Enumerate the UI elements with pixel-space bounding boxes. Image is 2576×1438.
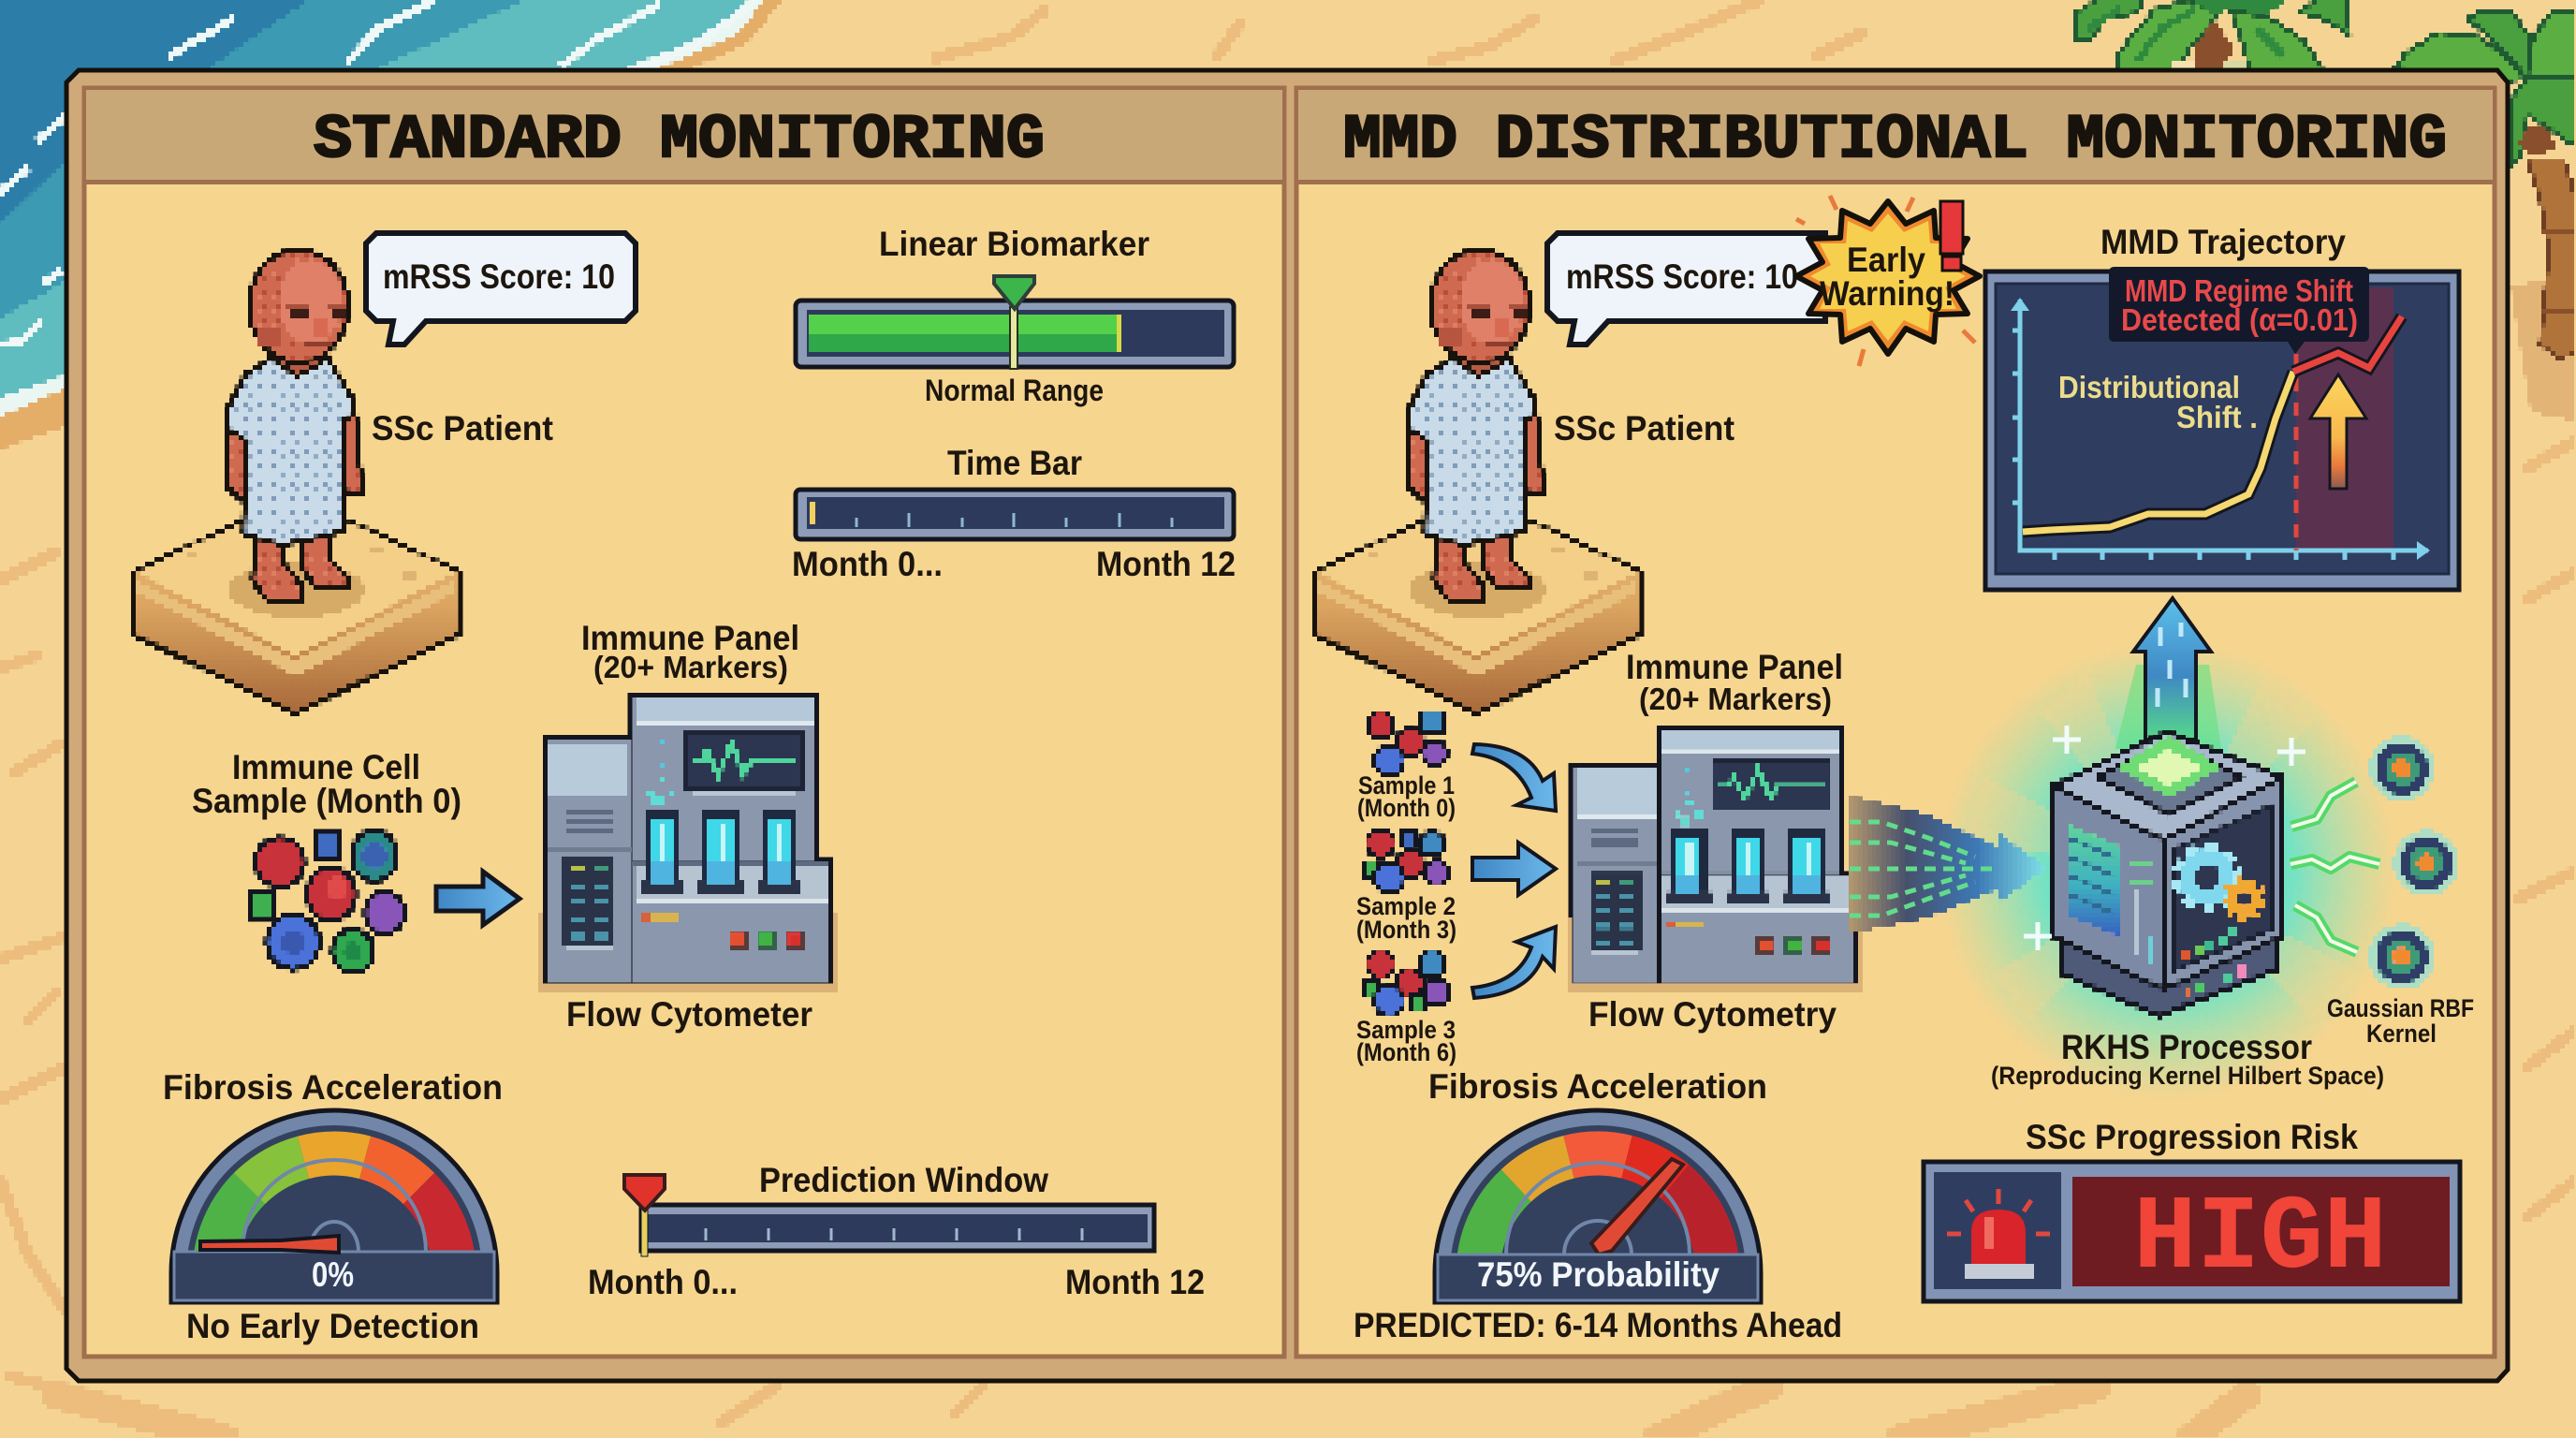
red marker [624,1175,665,1211]
red trajectory [2293,316,2402,372]
heading: MMD Trajectory [2100,223,2346,261]
header band [1298,90,2493,181]
sample clusters [1356,712,1456,1066]
glow behind RKHS processor [1939,641,2397,1100]
value: 0% [312,1255,354,1294]
panel background [1296,88,2495,1357]
readout band [1438,1255,1758,1300]
heading: SSc Progression Risk [2026,1118,2358,1156]
MMD trajectory chart: Detected (α=0.01) [2121,302,2358,337]
sample clusters: (Month 3) [1356,916,1456,944]
background: palm tree left [2076,0,2349,71]
yellow trajectory [2023,372,2293,532]
fibrosis gauge right [1354,1067,1842,1344]
arrow: sample to cytometer [436,872,520,925]
panel background [84,88,1284,1357]
label: SSc Patient: SSc Patient [372,409,553,448]
marker triangle [994,276,1034,309]
bar frame [796,301,1234,367]
sample 3 label: Sample 3 [1356,1016,1456,1044]
right screen [2174,805,2272,971]
platform left [134,496,459,713]
fibrosis gauge left [163,1068,503,1345]
wave signals [2291,782,2379,952]
label: SSc Patient right: SSc Patient [1554,409,1734,448]
heading: Fibrosis Acceleration [1428,1067,1767,1106]
heading: Prediction Window [759,1161,1048,1199]
end label: Month 12 [1096,545,1236,583]
speech bubble left [366,233,636,345]
needle [1010,307,1017,369]
immune panel heading left: Immune Panel [581,619,799,657]
shaded region [2296,287,2393,550]
needle [1591,1159,1683,1255]
speech bubble right: mRSS Score: 10 [1566,257,1798,296]
dial segments [1478,1153,1718,1273]
label: Flow Cytometer: Flow Cytometer [566,995,812,1034]
axes [2012,300,2428,560]
burst [1796,201,1980,354]
data stream arrow [1847,795,2046,934]
platform right [1315,496,1640,713]
start label: Month 0... [792,545,943,583]
blue gear [2187,857,2228,898]
needle [200,1236,339,1253]
arrow: sample 2 straight [1472,843,1556,895]
immune cell sample heading: Immune Cell [232,748,420,786]
sample 3 cells [1364,950,1449,1016]
status lights [2183,951,2190,961]
sample clusters: (Month 0) [1357,794,1456,822]
MMD trajectory chart: MMD Regime Shift [2125,273,2353,308]
base [2062,936,2277,1016]
immune cell sample heading [192,748,461,820]
sparkles [2024,726,2305,950]
green fill [809,315,1119,334]
immune panel heading left [581,619,799,684]
panel: standard monitoring [84,88,1284,1357]
label: Gaussian RBF Kernel [2327,994,2474,1048]
icon: immune cells [251,830,404,973]
alarm bay [1934,1172,2061,1289]
SSc progression risk [1924,1118,2460,1301]
label: distributional shift: Distributional [2058,370,2240,404]
readout band [174,1252,494,1300]
bar [641,1205,1154,1251]
time bar [792,444,1236,583]
MMD trajectory chart: Shift . [2176,400,2258,434]
immune panel heading right [1626,648,1843,716]
threshold line [2293,354,2299,550]
heading: Fibrosis Acceleration [163,1068,503,1107]
frame [1985,271,2459,590]
kernel icons [2369,736,2459,990]
RKHS processor [2053,732,2282,1016]
value: 75% Probability [1477,1255,1720,1294]
beam and up arrow to chart [2115,598,2221,749]
alarm [1947,1189,2050,1279]
bar [796,490,1234,539]
prediction window bar [588,1161,1205,1301]
exclamation mark [1940,201,1963,254]
callout [2109,267,2369,354]
heading: Time Bar [947,444,1082,482]
early warning burst: Warning! [1820,274,1954,313]
MMD trajectory chart [1985,223,2459,590]
title: MMD DISTRIBUTIONAL MONITORING [1343,105,2447,175]
early warning burst [1796,196,1980,366]
frame [1924,1162,2460,1301]
dial frame [171,1110,497,1302]
orange gear [2232,887,2256,911]
header band [86,90,1282,181]
heading: Linear Biomarker [879,225,1149,263]
label: RKHS Processor [1991,1028,2384,1090]
caption: No Early Detection [186,1307,479,1345]
top well [2097,742,2244,814]
immune panel heading right: (20+ Markers) [1639,682,1832,716]
label: Flow Cytometry: Flow Cytometry [1588,995,1837,1034]
title: STANDARD MONITORING [314,105,1045,175]
speech bubble left: mRSS Score: 10 [383,257,615,296]
risk display [2072,1177,2450,1286]
arrow: sample 1 curved [1472,744,1556,811]
text: Early [1847,241,1925,279]
background: palm tree right with trunk [2395,11,2576,421]
start label: Month 0... [588,1263,738,1301]
body [2053,786,2164,990]
spark dashes [1796,196,1975,366]
caption: Normal Range [925,374,1104,407]
sample 2 label: Sample 2 [1356,892,1456,920]
dial segments [214,1153,454,1273]
sample 1 label: Sample 1 [1358,771,1455,800]
panel: MMD distributional monitoring [1296,88,2495,1357]
patient figure left [227,250,362,601]
label: RKHS Processor: (Reproducing Kernel Hilbert Space) [1991,1062,2384,1090]
flow cytometer machine right [1567,728,1863,991]
label: Gaussian RBF Kernel: Gaussian RBF [2327,994,2474,1022]
up arrow [2310,374,2366,489]
sample clusters: (Month 6) [1356,1038,1456,1066]
speech bubble right [1547,233,1825,345]
dial frame [1435,1110,1761,1302]
sample 1 cells [1368,712,1447,775]
immune panel heading right: Immune Panel [1626,648,1843,686]
value: HIGH [2133,1180,2387,1299]
label: Gaussian RBF Kernel: Kernel [2366,1020,2437,1048]
end label: Month 12 [1065,1263,1205,1301]
immune cell sample heading: Sample (Month 0) [192,782,461,820]
background: ocean and shoreline [0,0,782,449]
label: RKHS Processor: RKHS Processor [2061,1028,2312,1066]
linear biomarker gauge [796,225,1234,407]
patient figure right [1409,250,1544,601]
caption: PREDICTED: 6-14 Months Ahead [1354,1306,1842,1344]
left screen [2067,824,2118,936]
flow cytometer machine left [540,696,836,992]
arrow: sample 3 curved [1472,927,1556,998]
sample 2 cells [1364,829,1449,893]
immune panel heading left: (20+ Markers) [593,650,788,684]
